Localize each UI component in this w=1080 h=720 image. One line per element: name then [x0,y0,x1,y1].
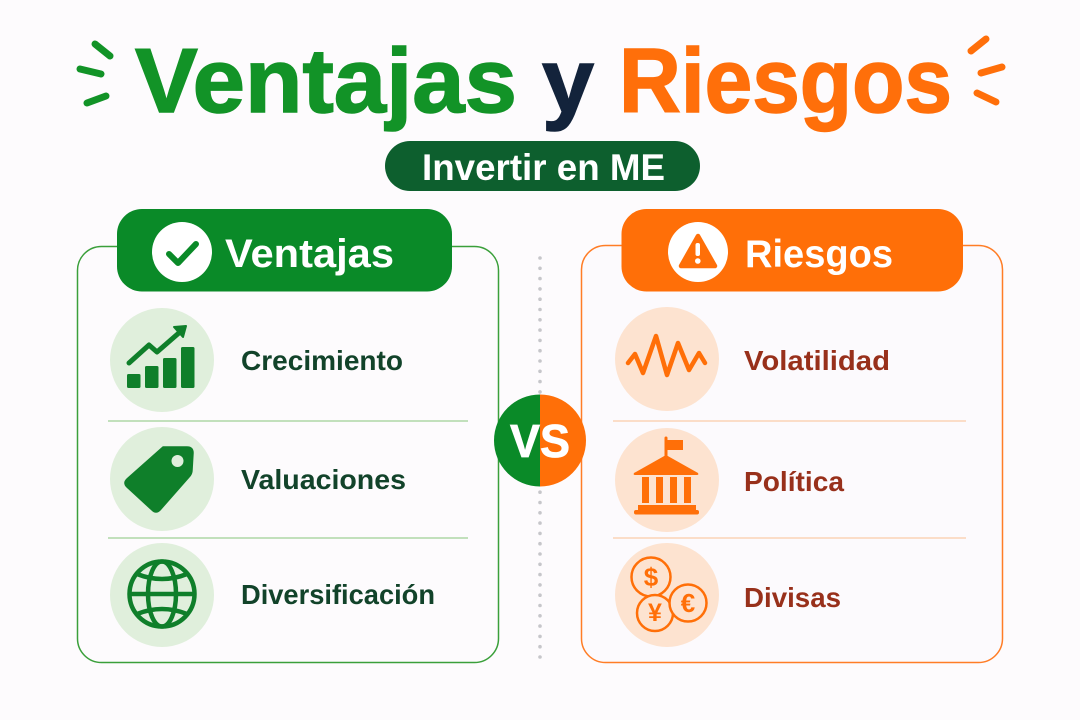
icon: price tag [110,427,214,531]
title: y [542,31,594,132]
icon: volatility line [615,307,719,411]
panel: ventajas [78,209,498,662]
icon: currencies [615,543,719,647]
label: crecimiento: Crecimiento [241,345,403,376]
panel heading: ventajas [117,209,452,292]
icon: green sparks [80,44,110,103]
title [135,31,952,132]
panel: riesgos [582,209,1002,662]
panel heading: ventajas: Ventajas [225,232,394,276]
icon: orange sparks [971,39,1002,102]
vs badge [494,394,586,486]
icon: government building [615,428,719,532]
vs badge: VS [510,415,570,467]
label: diversificación: Diversificación [241,579,435,610]
label: volatilidad: Volatilidad [744,345,890,376]
title: Ventajas [135,31,517,132]
icon: globe [110,543,214,647]
icon: currencies: € [681,588,695,618]
icon: currencies: $ [644,562,659,592]
label: política: Política [744,466,844,497]
icon: growth chart [110,308,214,412]
panel heading: riesgos [622,209,963,292]
label: divisas: Divisas [744,582,841,613]
icon: currencies: ¥ [648,599,662,627]
subtitle pill: Invertir en ME [422,147,665,188]
label: valuaciones: Valuaciones [241,464,406,495]
panel heading: riesgos: Riesgos [745,233,893,276]
subtitle pill [385,141,700,191]
title: Riesgos [619,31,952,132]
